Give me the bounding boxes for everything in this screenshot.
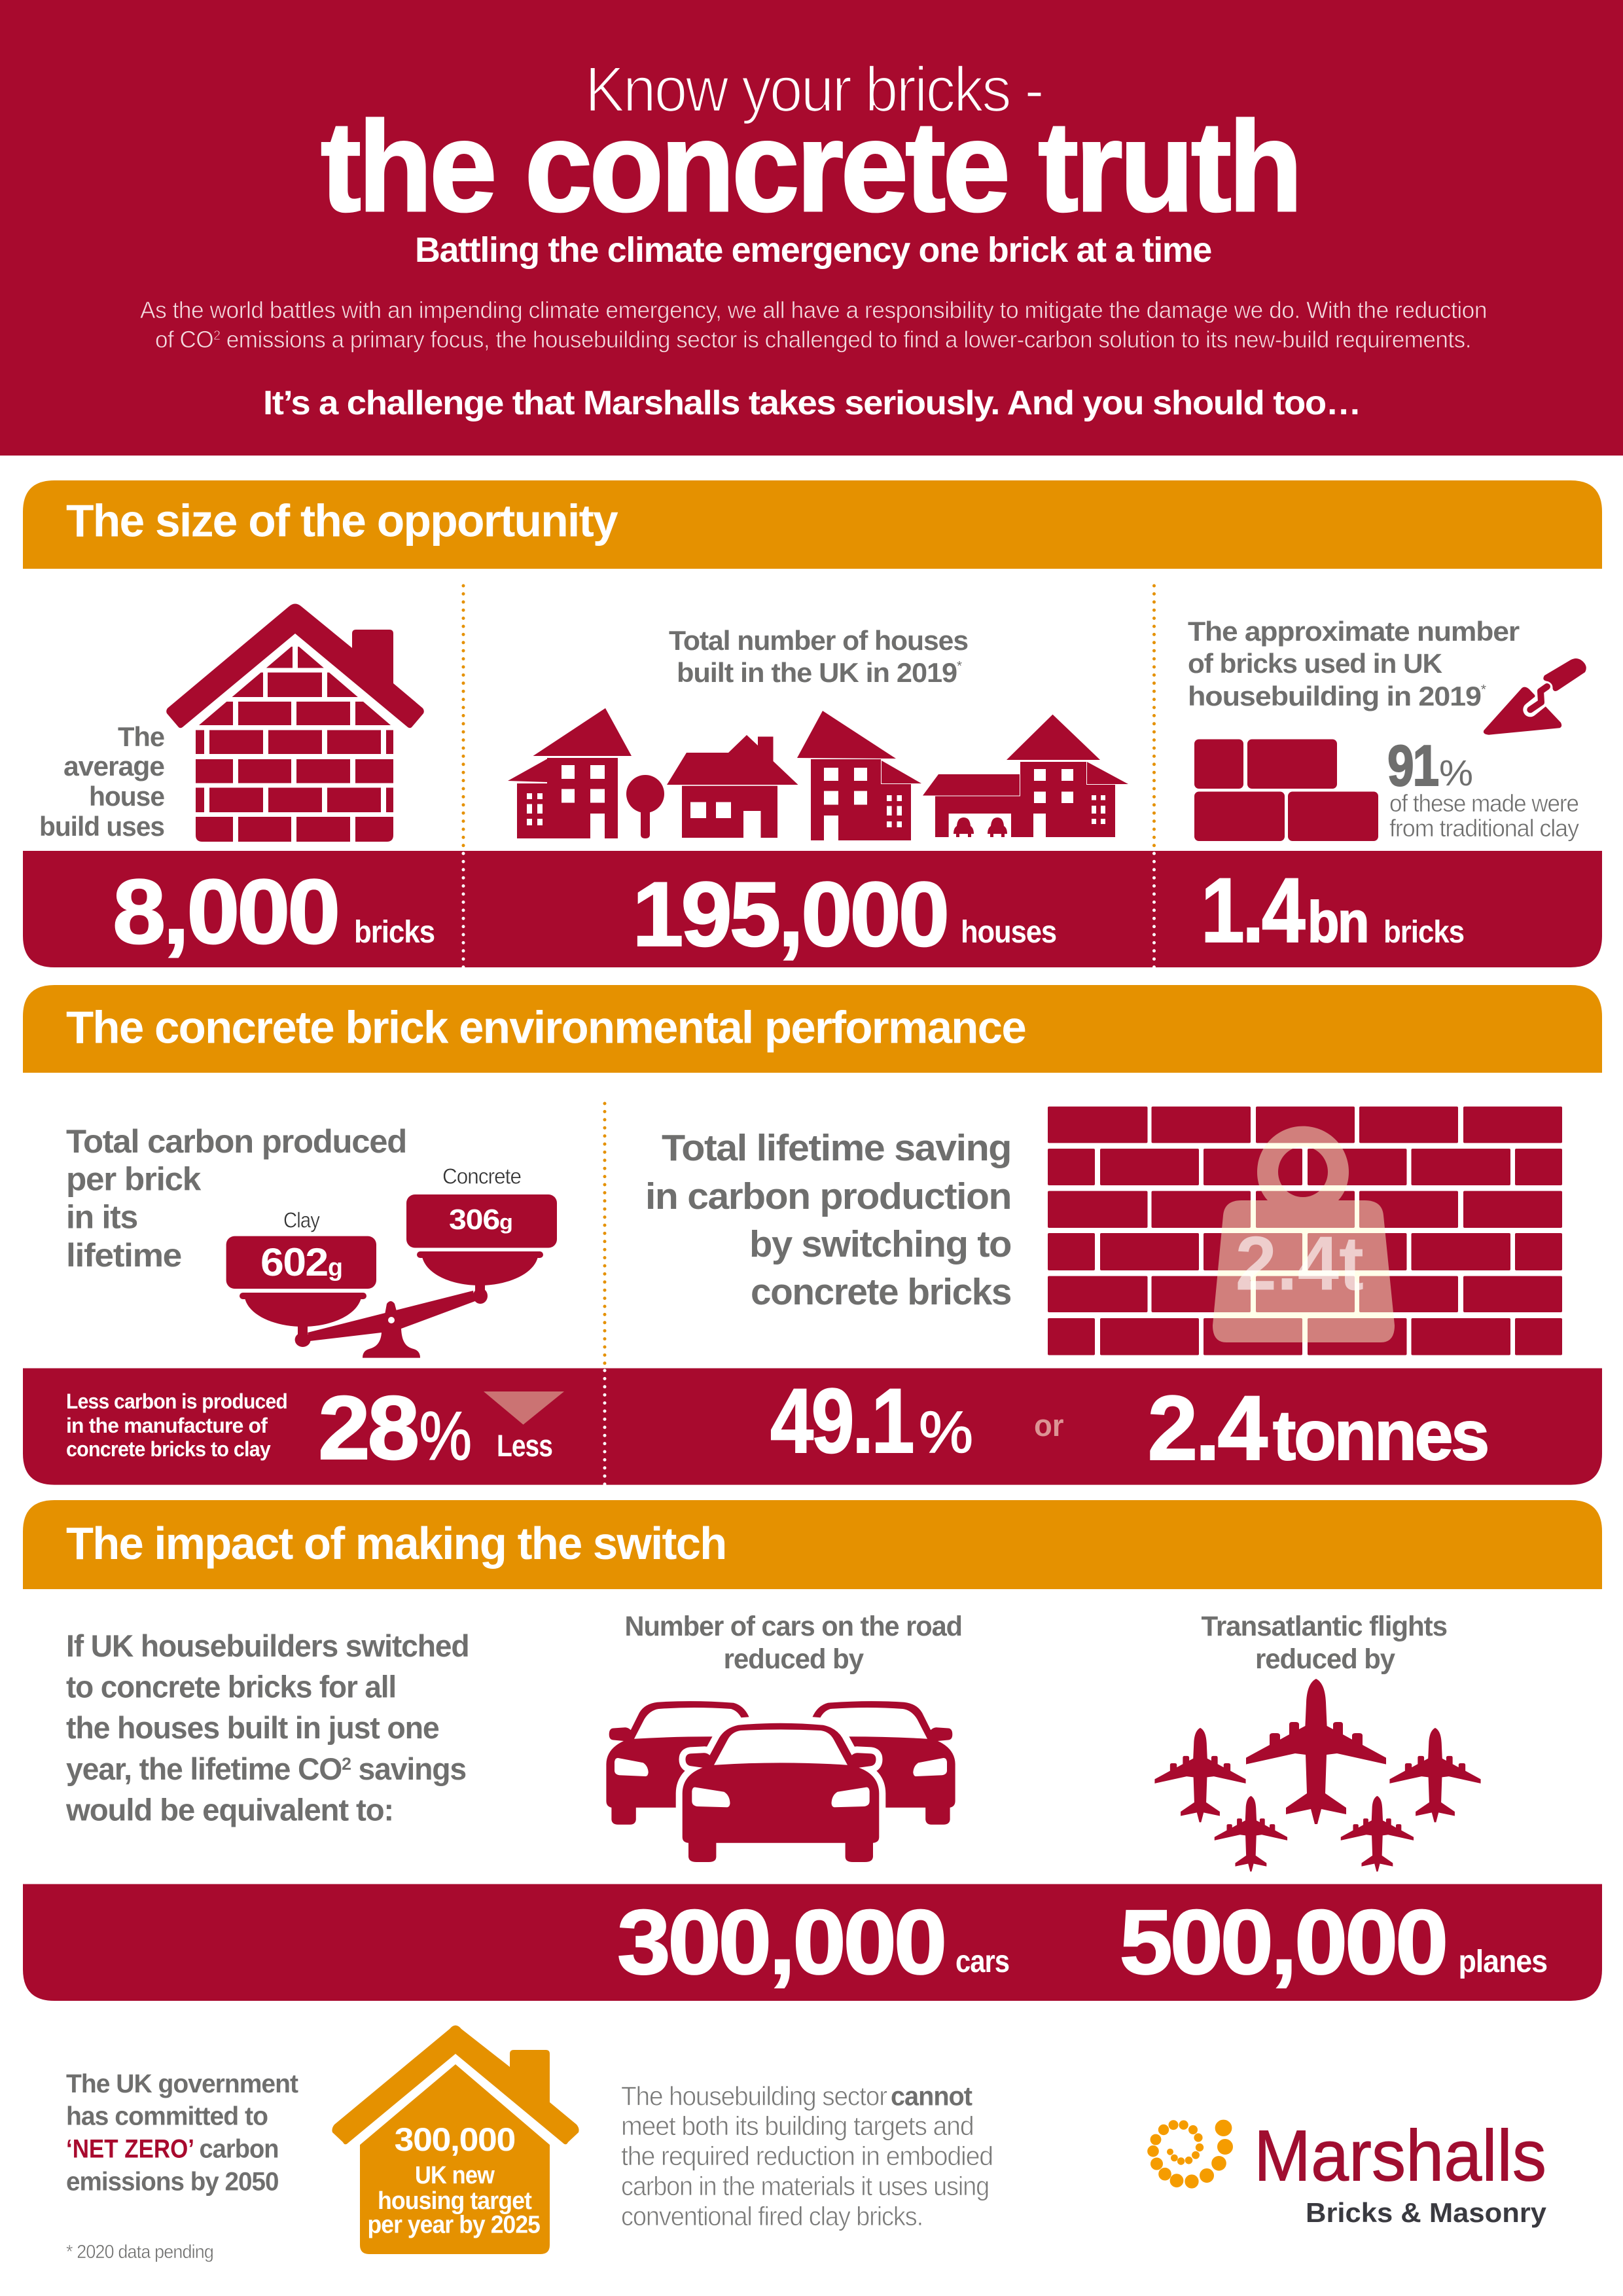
concrete brick: 306 [449, 1204, 499, 1236]
number: 1.4bn bricks: 1.4 [1201, 859, 1306, 961]
concrete brick: g [499, 1210, 512, 1234]
weight overlay [1213, 1126, 1395, 1342]
text: total number of houses: built in the UK in 2019 [677, 657, 948, 688]
red stat bar 2 [23, 1368, 1602, 1485]
clay label: Clay [283, 1208, 320, 1232]
text: housebuilding sector cannot: meet both its building targets and [621, 2111, 974, 2141]
section heading: environmental performance [23, 985, 1602, 1073]
text: total carbon per brick [66, 1123, 406, 1274]
logo: Marshalls Bricks and Masonry: Marshalls [1254, 2116, 1546, 2197]
text: approximate number of bricks: The approximate number [1188, 616, 1520, 647]
section heading: environmental performance: The concrete brick environmental performance [66, 1001, 1026, 1052]
clay brick: 602 [260, 1240, 328, 1284]
text: approximate number of bricks: of bricks used in UK [1188, 648, 1442, 679]
text: total carbon per brick: per brick [66, 1160, 201, 1197]
garage car one [954, 817, 974, 837]
number: 28 percent less [318, 1378, 564, 1479]
number: 28 percent less: 28 [318, 1378, 417, 1479]
housing target text: 300,000 [395, 2121, 515, 2158]
text: less carbon is produced: concrete bricks to clay [66, 1437, 271, 1461]
text: less carbon is produced: in the manufacture of [66, 1414, 268, 1437]
text: if UK housebuilders switched [65, 1628, 469, 1827]
text: total lifetime saving: by switching to [749, 1223, 1011, 1265]
text: number of cars on the road: reduced by [724, 1643, 864, 1675]
text: the average house build uses: build uses [39, 811, 164, 842]
text: housebuilding sector cannot: cannot [891, 2081, 972, 2111]
back right car [813, 1701, 955, 1825]
number: 500,000 planes: 500,000 [1119, 1890, 1446, 1993]
stat: 91 percent: 91 [1387, 733, 1438, 798]
number: 500,000 planes: planes [1458, 1945, 1547, 1979]
number: 49.1 percent: 49.1 [770, 1369, 912, 1472]
number: 28 percent less: % [419, 1398, 472, 1475]
header panel [0, 0, 1623, 456]
text: total number of houses: Total number of houses [669, 625, 968, 656]
text: UK government net zero: carbon [199, 2135, 279, 2164]
text: transatlantic flights [1202, 1611, 1447, 1675]
intro text: of CO [155, 326, 215, 353]
stat: 91 percent: from traditional clay [1389, 815, 1580, 842]
intro text: As the world battles with an impending climate emergency, we all have a responsibility to mitigate the damage we do. With the reduction [140, 296, 1487, 323]
plane lower right [1341, 1796, 1414, 1871]
text: UK government net zero: has committed to [66, 2102, 268, 2131]
stat: 91 percent: of these made were [1389, 790, 1578, 817]
text: transatlantic flights: Transatlantic flights [1202, 1611, 1447, 1642]
text: if UK housebuilders switched: 2 [342, 1754, 351, 1774]
number: 1.4bn bricks [1201, 859, 1464, 961]
house two [667, 735, 798, 838]
red stat bar 1 [23, 851, 1602, 967]
text: approximate number of bricks: housebuilding in 2019 [1188, 681, 1462, 711]
number: 28 percent less: Less [497, 1428, 552, 1463]
house four with garage [923, 715, 1128, 837]
number: 300,000 cars: cars [955, 1945, 1009, 1979]
brick wall [1048, 1107, 1562, 1355]
scale body [240, 1251, 543, 1358]
text: housebuilding sector cannot: carbon in the materials it uses using [621, 2171, 989, 2201]
number: 8,000 bricks [113, 860, 435, 963]
number: 2.4 tonnes: tonnes [1273, 1395, 1488, 1475]
plane left [1154, 1728, 1246, 1822]
logo spiral dots [1148, 2121, 1232, 2188]
text: housebuilding sector cannot: conventional fired clay bricks. [621, 2201, 923, 2231]
subtitle: Battling the climate emergency one brick at a time [415, 230, 1211, 270]
section heading: size of the opportunity [23, 480, 1602, 569]
plane lower left [1215, 1796, 1287, 1871]
text: total carbon per brick: in its [66, 1199, 137, 1236]
text: less carbon is produced: Less carbon is produced [66, 1390, 287, 1413]
text: total lifetime saving: concrete bricks [751, 1271, 1011, 1313]
clay brick: g [328, 1254, 342, 1282]
text: the average house build uses: house [89, 781, 164, 812]
plane right [1389, 1728, 1481, 1822]
icon: orange house with housing target [332, 2025, 579, 2254]
number: 195,000 houses: houses [961, 915, 1056, 950]
number: 300,000 cars: 300,000 [617, 1890, 944, 1993]
concrete brick [406, 1194, 557, 1247]
icon: trowel [1484, 658, 1586, 735]
text: if UK housebuilders switched: year, the lifetime CO [66, 1751, 346, 1786]
number: 2.4 tonnes [1148, 1376, 1488, 1479]
text: approximate number of bricks: * [1481, 683, 1486, 697]
number: 2.4 tonnes: 2.4 [1148, 1376, 1268, 1479]
text: UK government net zero: The UK government [66, 2070, 298, 2098]
title line 1: Know your bricks - [585, 54, 1043, 125]
text: housebuilding sector cannot: the required reduction in embodied [621, 2141, 993, 2171]
chart: balance scale clay vs concrete [226, 1164, 557, 1358]
tree [626, 775, 664, 838]
divider lines section 1 [463, 586, 1154, 967]
footnote: * 2020 data pending [66, 2242, 213, 2263]
logo: Marshalls Bricks and Masonry: Bricks & Masonry [1306, 2197, 1547, 2228]
icon: cars [606, 1701, 955, 1862]
text: or: or [1034, 1408, 1064, 1443]
text: housebuilding sector cannot: The housebuilding sector [621, 2081, 887, 2111]
number: 8,000 bricks: bricks [354, 915, 435, 950]
text: UK government net zero: ‘NET ZERO’ [66, 2135, 194, 2164]
number: 1.4bn bricks: bricks [1383, 915, 1464, 950]
concrete label: Concrete [442, 1164, 521, 1189]
text: if UK housebuilders switched: If UK housebuilders switched [66, 1628, 469, 1663]
title line 2: the concrete truth [321, 95, 1300, 238]
house three [797, 711, 921, 840]
icon: row of houses [508, 708, 1128, 840]
section heading: impact of making the switch: The impact of making the switch [66, 1518, 726, 1569]
logo: Marshalls Bricks and Masonry [1148, 2116, 1547, 2228]
text: total carbon per brick: Total carbon produced [66, 1123, 406, 1160]
front car [683, 1723, 879, 1862]
house one [508, 708, 632, 838]
housing target text: UK new [415, 2162, 495, 2189]
text: number of cars on the road [624, 1611, 962, 1675]
intro text: 2 [213, 329, 221, 343]
text: UK government net zero: emissions by 2050 [66, 2168, 279, 2197]
housing target text: per year by 2025 [368, 2212, 541, 2239]
icon: stacked bricks [1194, 740, 1378, 841]
text: UK government net zero [66, 2070, 298, 2197]
text: transatlantic flights: reduced by [1255, 1643, 1395, 1675]
text: if UK housebuilders switched: the houses built in just one [66, 1710, 439, 1745]
text: total lifetime saving [645, 1127, 1011, 1313]
intro text: emissions a primary focus, the housebuilding sector is challenged to find a lower-carbon solution to its new-build requirements. [221, 326, 1471, 353]
text: the average house build uses: average [63, 751, 164, 781]
text: housebuilding sector cannot [621, 2081, 993, 2231]
text: number of cars on the road: Number of cars on the road [624, 1611, 962, 1642]
icon: brick wall with 2.4t weight [1048, 1107, 1562, 1355]
icon: down triangle [484, 1391, 564, 1425]
stat: 91 percent [1387, 733, 1580, 842]
red stat bar 3 [23, 1884, 1602, 2001]
intro text [140, 296, 1487, 353]
text: total lifetime saving: Total lifetime saving [662, 1127, 1011, 1169]
text: the average house build uses: The [118, 721, 164, 752]
text: approximate number of bricks [1188, 616, 1520, 711]
housing target text [368, 2121, 541, 2239]
icon: planes [1154, 1679, 1481, 1871]
garage car two [988, 817, 1007, 837]
weight overlay: 2.4t [1236, 1220, 1364, 1306]
challenge statement: It’s a challenge that Marshalls takes seriously. And you should too… [263, 384, 1361, 422]
housing target text: housing target [378, 2187, 532, 2215]
text: if UK housebuilders switched: would be equivalent to: [65, 1793, 393, 1827]
text: total lifetime saving: in carbon production [645, 1175, 1011, 1217]
number: 195,000 houses: 195,000 [632, 863, 947, 965]
text: total number of houses [669, 625, 968, 688]
text: total carbon per brick: lifetime [66, 1237, 181, 1274]
text: total number of houses: * [957, 659, 962, 673]
text: the average house build uses [39, 721, 164, 842]
text: if UK housebuilders switched: to concrete bricks for all [66, 1669, 396, 1704]
text: if UK housebuilders switched: savings [351, 1751, 466, 1786]
back left car [606, 1701, 749, 1825]
stat: 91 percent: % [1439, 752, 1473, 793]
section heading: impact of making the switch [23, 1500, 1602, 1589]
number: 8,000 bricks: 8,000 [113, 860, 338, 963]
text: less carbon is produced [66, 1390, 287, 1461]
icon: brick house [166, 603, 424, 842]
plane large [1246, 1679, 1386, 1824]
number: 1.4bn bricks: bn [1308, 889, 1368, 954]
section heading: size of the opportunity: The size of the opportunity [66, 495, 618, 546]
divider line section 2 [603, 1103, 606, 1484]
clay brick [226, 1236, 376, 1289]
number: 49.1 percent: % [919, 1400, 973, 1465]
